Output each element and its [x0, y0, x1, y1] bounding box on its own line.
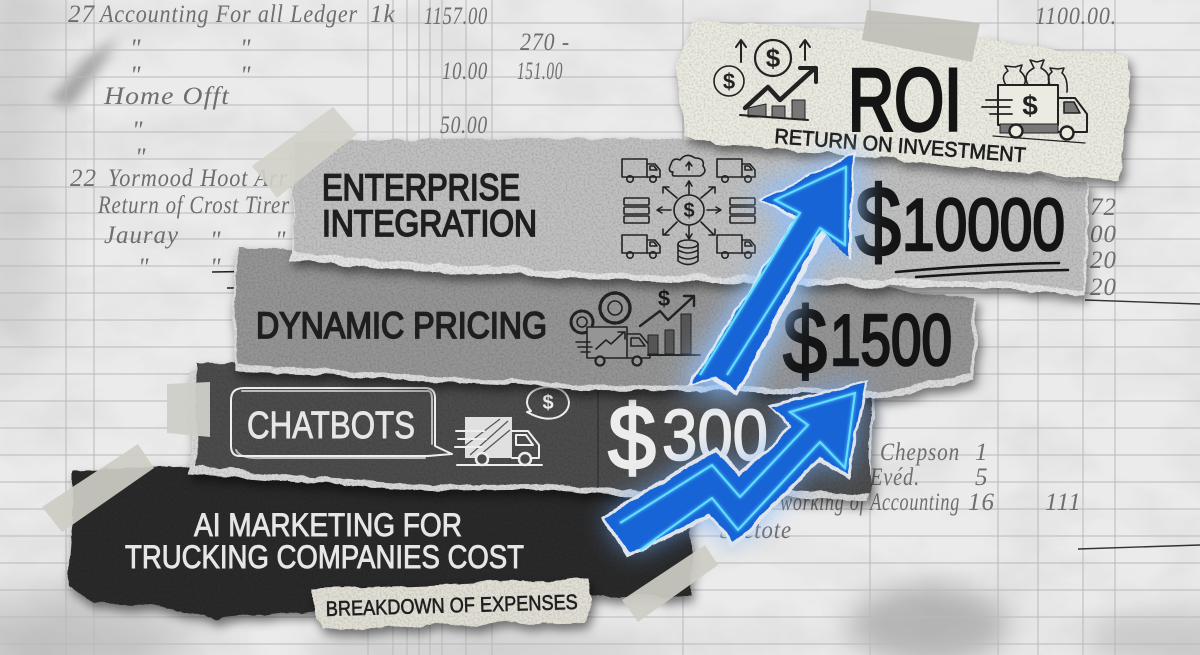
cost: $1500: $ — [783, 288, 827, 393]
tape: title bottom right — [622, 545, 718, 622]
panel: enterprise integration — [290, 138, 1088, 296]
cost: $300 — [608, 387, 768, 489]
ledger handwriting: Accounting For all Ledger — [98, 1, 358, 28]
icon: delivery truck with dollar bubble: $ — [542, 392, 554, 414]
ledger handwriting: Home Offt — [103, 83, 230, 110]
ledger handwriting: Evéd. — [869, 464, 920, 491]
heading: ROI: ROI — [848, 50, 962, 149]
cost: $1500 — [783, 288, 952, 393]
dynamic pricing torn paper — [232, 250, 978, 398]
ledger handwriting: 151.00 — [517, 58, 563, 85]
ledger handwriting: 16 — [968, 489, 995, 516]
ledger handwriting: 111 — [1045, 489, 1082, 516]
icon: integration hub — [622, 155, 755, 264]
icon: coins and rising chart — [714, 40, 816, 120]
ledger handwriting: 10.00 — [442, 58, 488, 85]
tape: title top left — [42, 444, 154, 532]
ledger handwriting: 270 - — [520, 29, 570, 56]
speech bubble with label — [231, 388, 452, 458]
cost: $10000 with underline — [855, 166, 1068, 278]
ledger handwriting: Yormood Hoot Arr — [108, 165, 288, 192]
ledger handwriting: " — [240, 35, 252, 62]
ledger handwriting: " — [130, 35, 142, 62]
tape: ROI top — [862, 10, 980, 62]
ledger handwriting: Jauray — [104, 222, 179, 249]
ledger handwriting: " — [210, 227, 222, 254]
title text: AI MARKETING FOR — [194, 507, 462, 543]
cost: $1500: 1500 — [830, 301, 952, 381]
subheading: return on investment: RETURN ON INVESTMENT — [774, 125, 1027, 167]
ledger handwriting: 27 — [68, 1, 96, 28]
label: enterprise integration: ENTERPRISE — [322, 167, 520, 208]
icon: coins and rising chart: $ — [766, 43, 781, 73]
ledger handwriting: working of Accounting — [780, 489, 960, 516]
cost: $10000 with underline: 10000 — [902, 185, 1065, 266]
ledger handwriting: " — [135, 144, 146, 171]
label: dynamic pricing: DYNAMIC PRICING — [256, 305, 547, 346]
title text — [125, 507, 524, 575]
icon: integration hub: $ — [683, 200, 695, 222]
dark torn paper — [68, 466, 692, 619]
ledger handwriting: " — [275, 227, 286, 254]
ledger handwriting: " — [132, 117, 144, 144]
ledger handwriting: Chepson — [880, 439, 960, 466]
icon: delivery truck with dollar bubble — [455, 387, 569, 465]
cost: $10000 with underline: $ — [855, 166, 901, 278]
ledger handwriting: Return of Crost Tirer — [97, 192, 290, 219]
subtitle: breakdown of expenses — [310, 578, 592, 630]
chatbots torn paper — [190, 362, 873, 502]
ledger handwriting: 1 — [975, 439, 988, 466]
arrow: lower blue zigzag arrow — [601, 380, 868, 558]
icon: money truck: $ — [1022, 90, 1038, 121]
ledger handwriting: " — [130, 62, 142, 89]
ledger handwriting: Sectote — [720, 517, 792, 544]
ROI torn paper — [675, 20, 1130, 181]
ledger handwriting: " — [240, 62, 252, 89]
tape: enterprise left — [252, 107, 357, 198]
ledger handwriting: 22 — [70, 165, 97, 192]
icon: gears, truck and rising chart — [571, 286, 700, 366]
icon: coins and rising chart: $ — [723, 69, 735, 94]
label: enterprise integration: INTEGRATION — [322, 203, 537, 244]
cost: $300: $ — [608, 387, 656, 489]
cost: $300: 300 — [662, 396, 768, 476]
enterprise torn paper — [290, 138, 1088, 296]
icon: gears, truck and rising chart: $ — [658, 286, 670, 311]
ledger handwriting: 1k — [370, 1, 396, 28]
ledger handwriting: " — [210, 254, 222, 281]
icon: money truck — [982, 60, 1087, 143]
ledger handwriting: 20 — [1090, 247, 1117, 274]
tape: chatbots left — [167, 382, 210, 437]
panel: chatbots — [190, 362, 873, 502]
ledger handwriting: 5 — [975, 464, 988, 491]
subtitle: breakdown of expenses: BREAKDOWN OF EXPENSES — [325, 591, 578, 621]
panel: title strip, dark paper — [68, 466, 692, 619]
panel: ROI — [675, 20, 1130, 181]
label: enterprise integration — [322, 167, 537, 244]
arrow: upper blue rising arrow — [680, 150, 860, 398]
panel: dynamic pricing — [232, 250, 978, 398]
speech bubble with label: CHATBOTS — [247, 405, 415, 447]
ledger handwriting — [68, 1, 1200, 549]
ledger handwriting: 72 — [1090, 194, 1117, 221]
ledger handwriting: 1100.00. — [1035, 3, 1117, 30]
ledger handwriting: 00 — [1090, 221, 1117, 248]
ledger handwriting: 50.00 — [440, 112, 488, 139]
ledger handwriting: 1157.00 — [424, 3, 488, 30]
title text: TRUCKING COMPANIES COST — [125, 539, 524, 575]
ledger handwriting: 20 — [1090, 274, 1117, 301]
ledger handwriting: " — [138, 254, 150, 281]
